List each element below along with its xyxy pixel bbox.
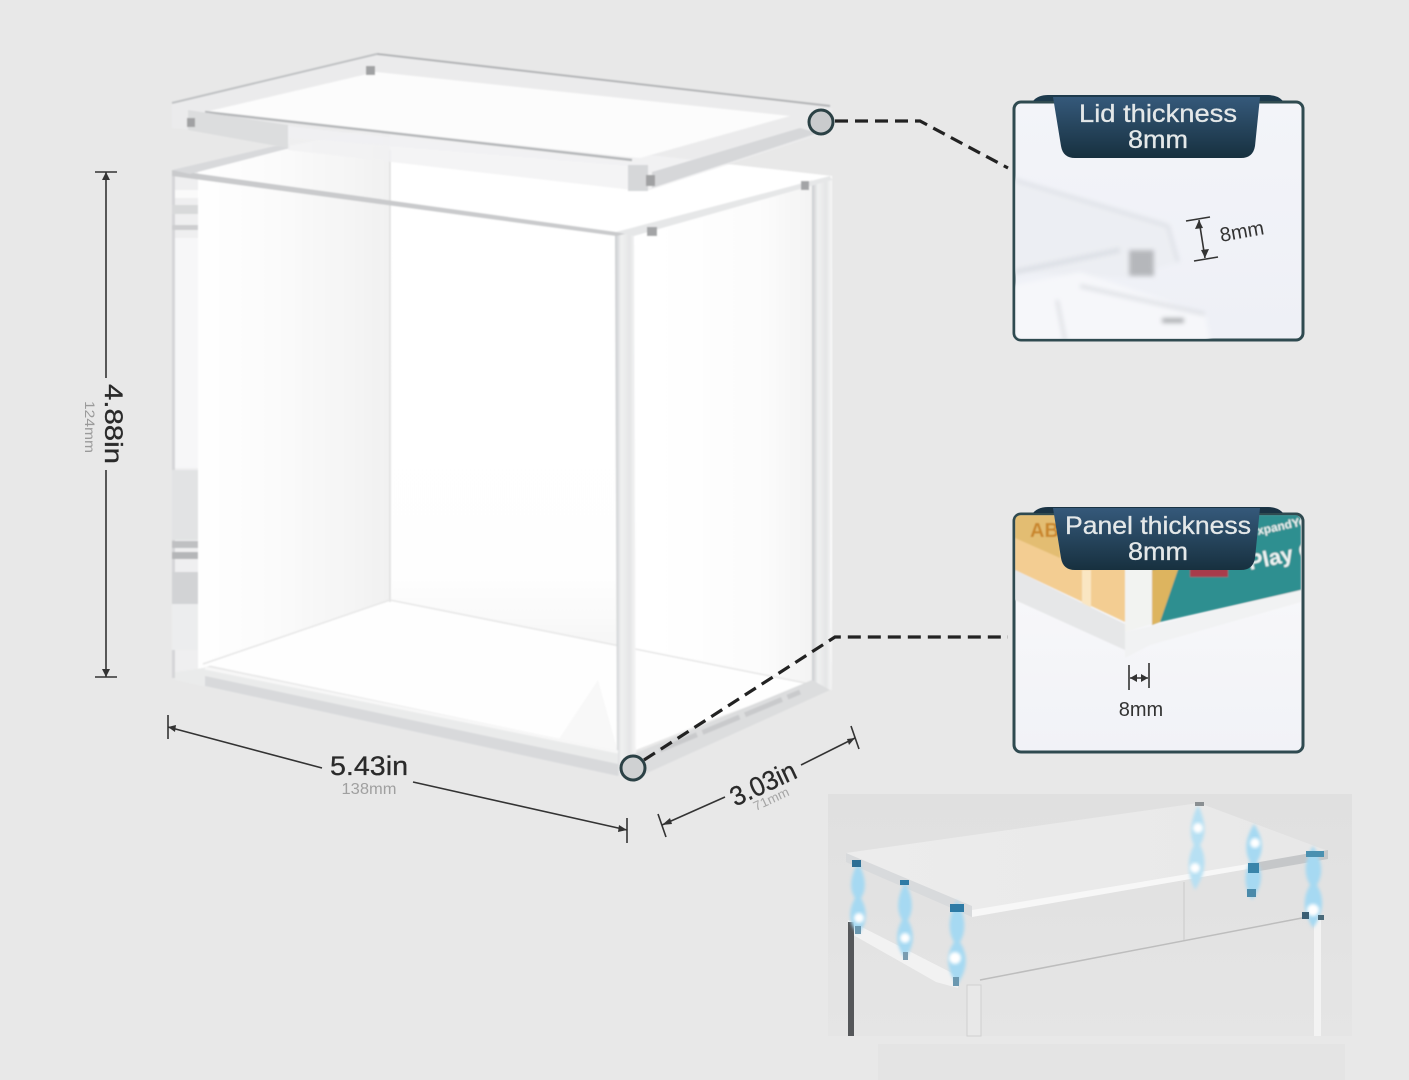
magnet glow 4 (1189, 802, 1205, 890)
dashed leader: panel (644, 637, 1008, 760)
front corner post (967, 985, 981, 1036)
case: front corner post (615, 232, 636, 776)
case: bottom right edge (624, 680, 830, 778)
dashed leader: lid (835, 121, 1008, 168)
lid: right block (652, 128, 818, 188)
label: 5.43in: 5.43in (330, 751, 408, 781)
header value: 8mm (1128, 126, 1188, 154)
header tab ears (1033, 507, 1283, 513)
callout marker: lid corner (809, 110, 833, 134)
magnet glow 6 (1302, 846, 1324, 928)
lid left edge (846, 853, 972, 917)
panel: panel thickness (1014, 507, 1331, 752)
header tab (1053, 97, 1260, 158)
label: 3.03in: 3.03in (725, 755, 801, 812)
case: centre back inner wall (390, 125, 832, 690)
header tab ears (1033, 95, 1283, 101)
case: back wall line (389, 150, 391, 602)
lid: pins (187, 66, 655, 186)
right post (1314, 920, 1321, 1036)
product art text: Play On (1246, 533, 1331, 575)
case: top rim right (616, 176, 832, 236)
magnet glow 1 (850, 860, 866, 934)
lid: left inner block (188, 110, 288, 148)
faint lower photo strip (878, 1044, 1345, 1080)
header text: Panel thickness (1065, 512, 1251, 540)
body upper edge (980, 918, 1302, 980)
8mm measure marker (1186, 217, 1218, 261)
magnet glow 3 (948, 900, 966, 986)
product art text: xpandYo (1256, 514, 1307, 538)
label: 138mm: 138mm (342, 781, 396, 798)
card background (1014, 102, 1303, 340)
panel close-up photo (1015, 515, 1301, 650)
panel: lid thickness (1014, 95, 1303, 340)
header tab (1053, 508, 1260, 570)
label: 4.88in: 4.88in (99, 384, 127, 464)
left dark post (848, 922, 854, 1036)
label: 124mm: 124mm (82, 401, 98, 453)
lid: back edge (377, 54, 830, 106)
body back post (1183, 882, 1185, 940)
case: floor (203, 600, 810, 752)
header value: 8mm (1128, 538, 1188, 566)
lid close-up photo (1015, 178, 1210, 340)
acrylic lid (172, 54, 834, 191)
dimension: width 5.43in (168, 715, 627, 843)
lid right edge (1248, 850, 1328, 873)
callout marker: panel corner (621, 756, 645, 780)
case: top rim front (172, 170, 634, 236)
photo: magnetic lid close-up (828, 794, 1352, 1036)
card background (1014, 514, 1303, 752)
case: left panel edge (172, 172, 198, 678)
8mm measure marker (1129, 663, 1149, 690)
lid: left edge (172, 54, 377, 103)
lid top (846, 803, 1328, 913)
photo background (828, 794, 1352, 1036)
lid front edge (972, 864, 1248, 917)
8mm label: 8mm (1119, 699, 1163, 721)
label: 71mm: 71mm (751, 784, 791, 814)
lid: clear centre (205, 72, 790, 158)
dimension: height 4.88in (95, 172, 127, 677)
dimension: depth 3.03in (658, 726, 859, 837)
case: corner pins (647, 181, 809, 236)
lid: corner post (628, 165, 648, 191)
lid: front face (288, 126, 632, 190)
acrylic case body (172, 125, 832, 778)
magnet glow 2 (897, 880, 913, 960)
case: left back inner wall (172, 125, 390, 678)
8mm label: 8mm (1218, 217, 1266, 247)
case: right inner wall (634, 180, 812, 750)
case: bottom front edge (175, 668, 618, 776)
lid: front top edge (205, 112, 632, 160)
lid: outer frame (172, 54, 834, 190)
magnet glow 5 (1245, 824, 1262, 900)
body left rim (848, 920, 958, 988)
case: floor back edges (203, 600, 810, 684)
case: top rim left (172, 143, 290, 174)
header text: Lid thickness (1079, 100, 1237, 128)
case: right panel edge (812, 178, 832, 695)
product art text: AB (1030, 520, 1059, 542)
